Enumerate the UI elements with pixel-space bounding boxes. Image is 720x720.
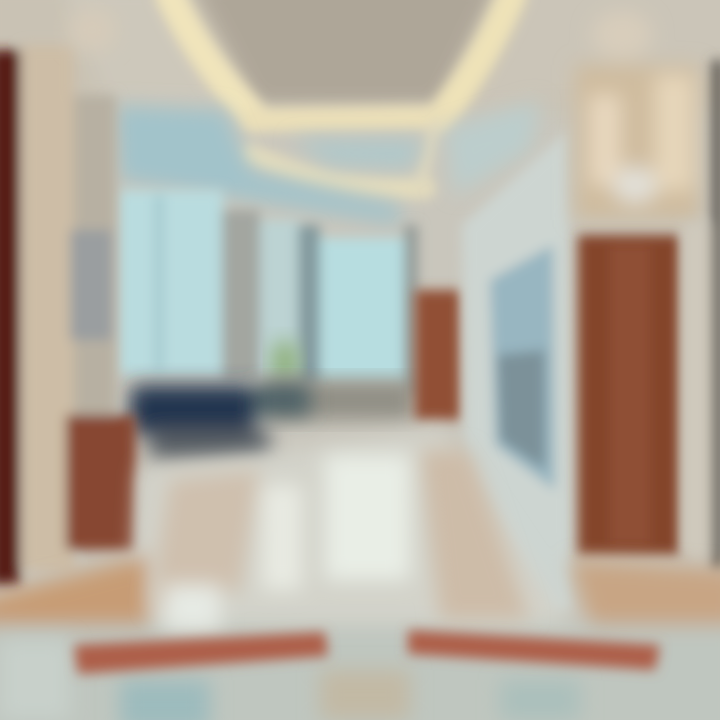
centre wood panel: [415, 290, 461, 420]
windows: [118, 190, 418, 395]
ceiling light strips: [170, 0, 512, 188]
floor: [0, 430, 720, 720]
ceiling: [0, 0, 720, 110]
right upper wall lamp panel: [575, 11, 700, 220]
right wood door: [578, 235, 680, 555]
right wall: [682, 60, 720, 570]
floor reflections: [0, 450, 580, 720]
left wall lamp: [68, 8, 116, 52]
red floor stripes: [74, 630, 660, 674]
green plant: [271, 340, 299, 384]
back wall base: [265, 380, 415, 420]
dark chairs: [130, 385, 310, 460]
upper blue glass band: [115, 100, 540, 225]
glass wall: [462, 130, 572, 615]
left wall: [0, 45, 136, 585]
